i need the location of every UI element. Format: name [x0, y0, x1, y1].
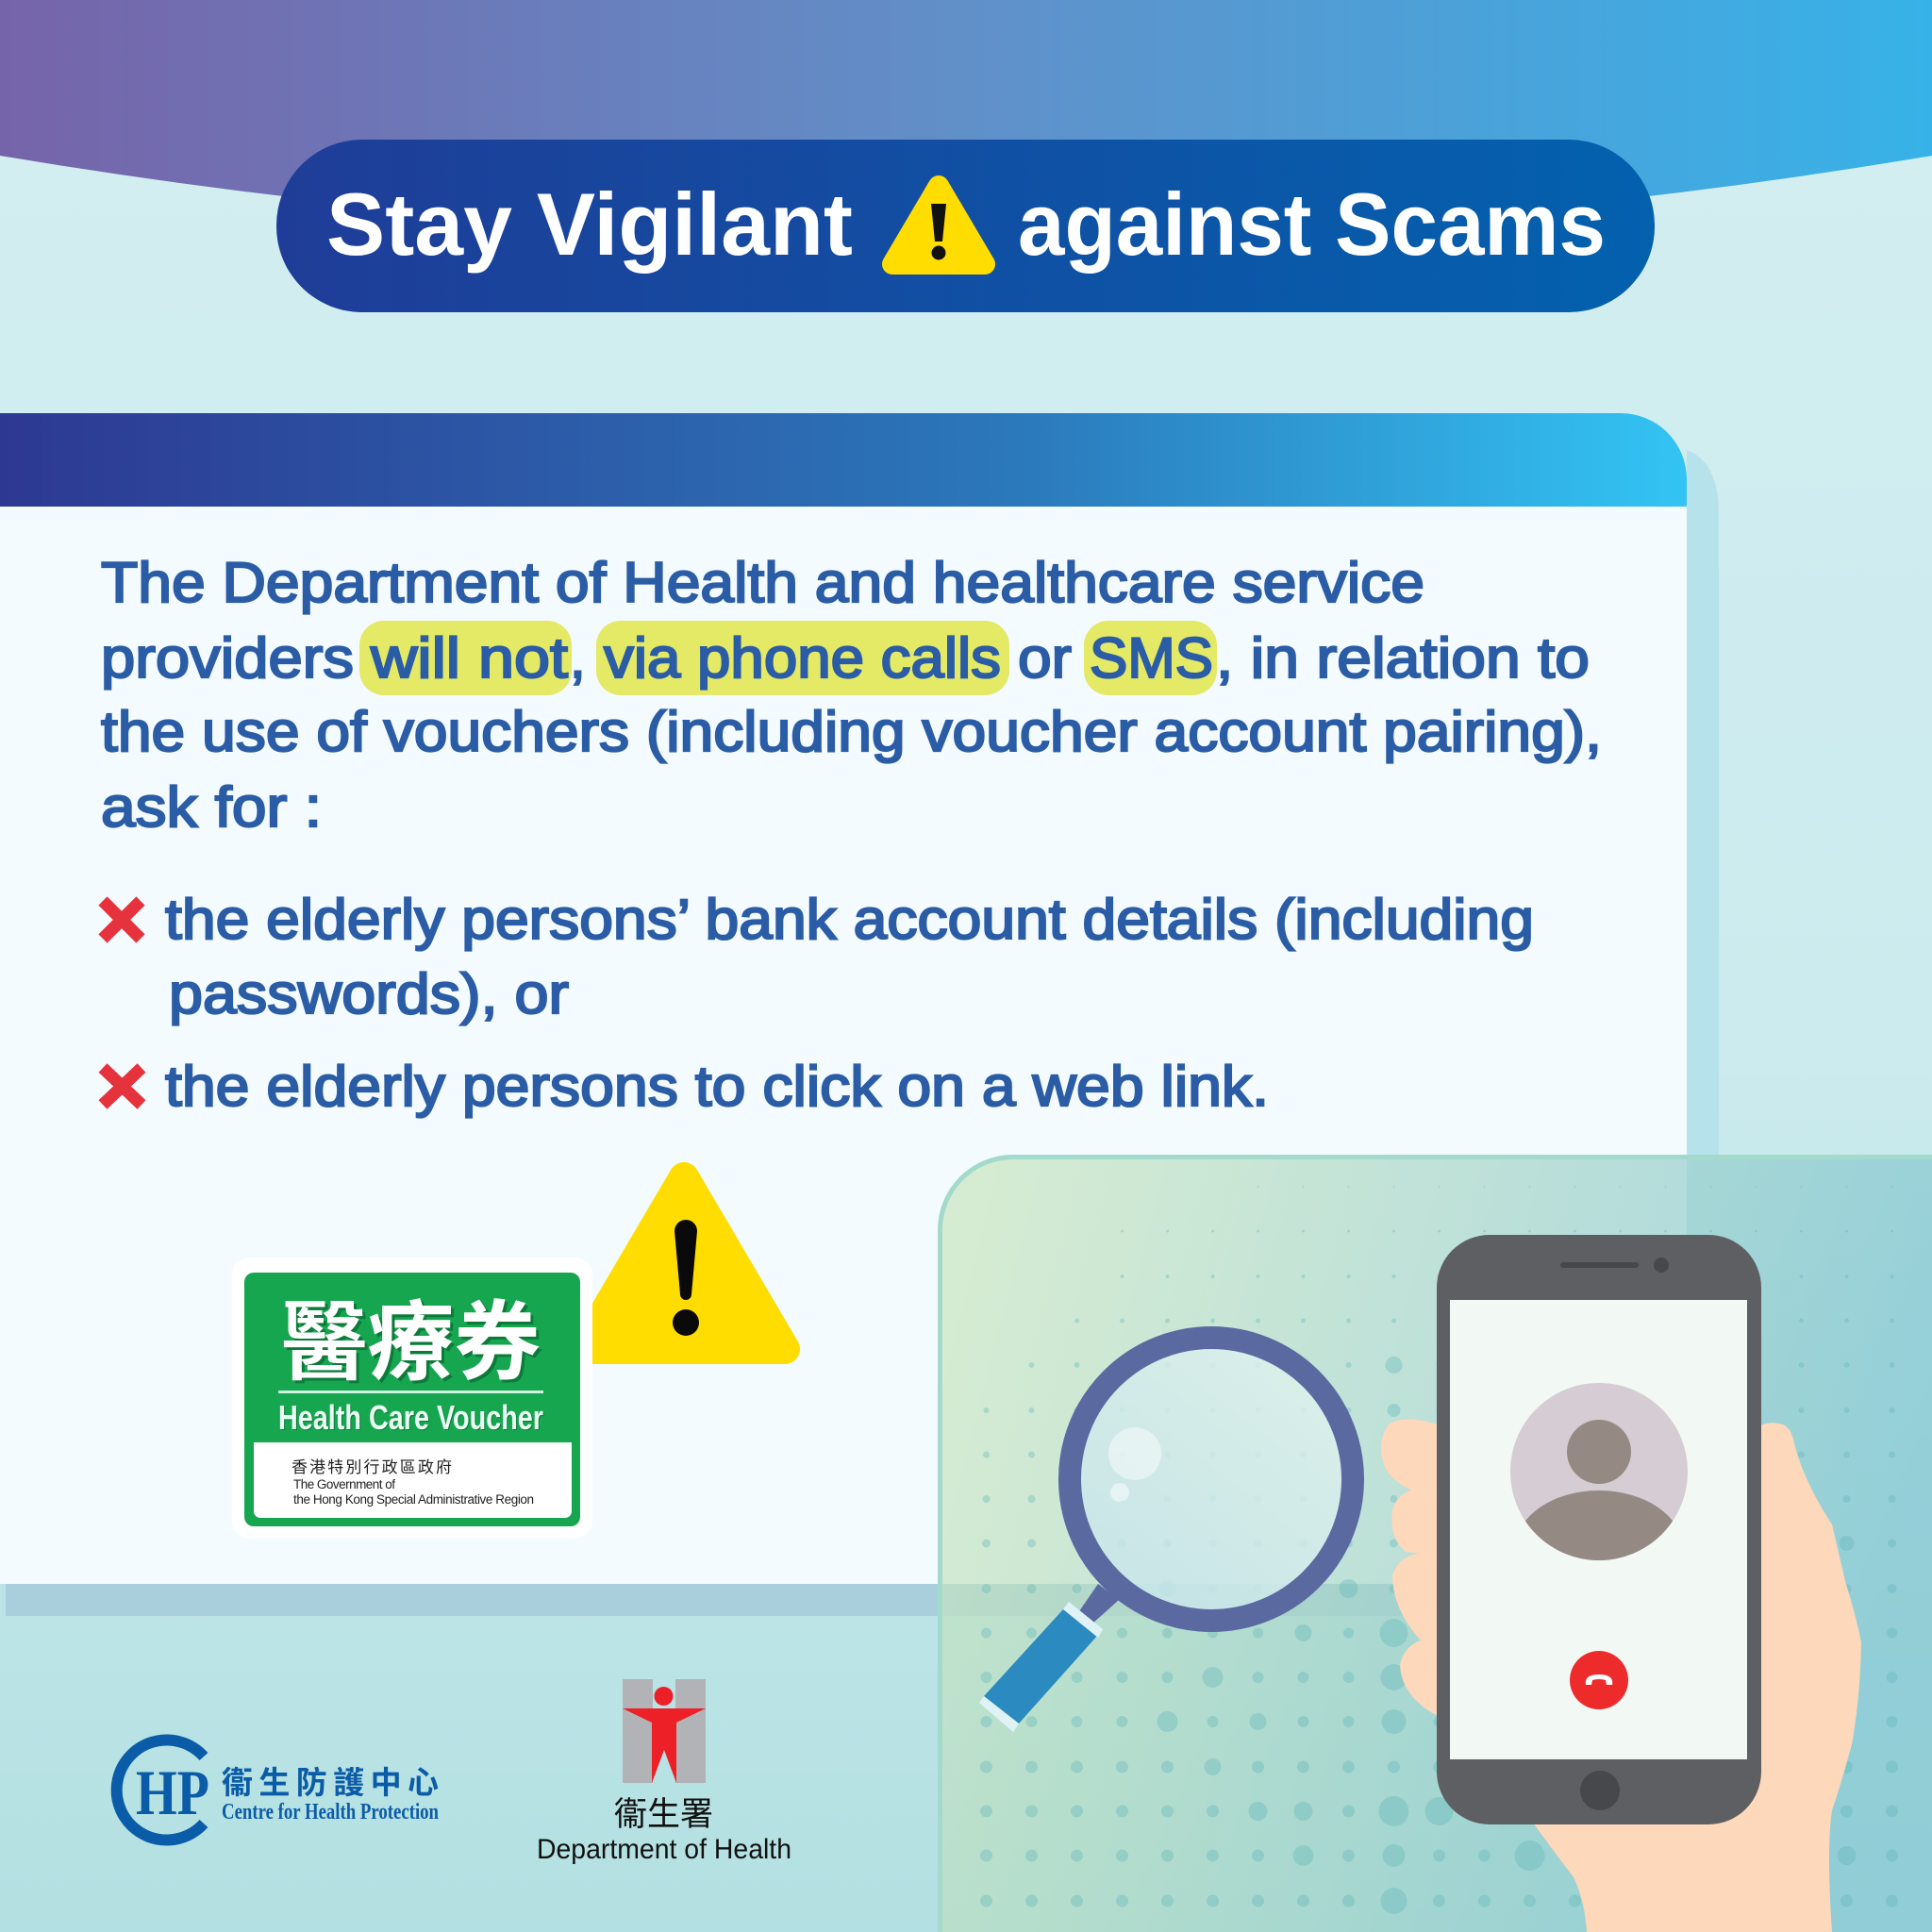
line 2: providers — [101, 626, 354, 690]
line 2: via phone calls — [604, 626, 1001, 690]
voucher chinese title: 醫療券 — [284, 1275, 543, 1401]
card right shadow — [1687, 450, 1719, 1155]
panel background — [938, 1155, 1932, 1932]
line 2: or — [1018, 626, 1072, 690]
phone body — [1437, 1235, 1761, 1824]
end call button — [1570, 1651, 1628, 1709]
list item 2: the elderly persons to click on a web link. — [165, 1055, 1269, 1118]
line 2: , in relation to — [1216, 626, 1590, 690]
logo: centre for health protection — [117, 1740, 439, 1840]
dot pattern — [987, 1187, 1932, 1914]
health care voucher logo: Health Care Voucher — [278, 1398, 543, 1437]
phone speaker — [1560, 1262, 1639, 1268]
grey H emblem — [623, 1679, 653, 1783]
list item 1: passwords), or — [169, 962, 569, 1025]
line 3: the use of vouchers (including voucher account pairing), — [101, 700, 1602, 763]
title: stay vigilant: Stay Vigilant — [326, 175, 853, 274]
caller avatar — [1510, 1383, 1688, 1560]
line 2: SMS — [1090, 626, 1213, 690]
english name: Centre for Health Protection — [222, 1800, 439, 1824]
highlight: will not — [359, 621, 572, 695]
card body — [0, 507, 1687, 1584]
finger 1 — [1381, 1419, 1443, 1500]
phone screen — [1450, 1300, 1747, 1759]
voucher government box: the Hong Kong Special Administrative Region — [293, 1492, 534, 1507]
list item 1: the elderly persons’ bank account details (including — [165, 888, 1534, 951]
lens — [1070, 1338, 1353, 1621]
icon: magnifying glass — [979, 1338, 1353, 1732]
panel: main card — [0, 413, 1719, 1616]
title pill — [276, 140, 1655, 312]
icon: hand holding phone — [1381, 1235, 1861, 1932]
english name: Department of Health — [537, 1834, 791, 1865]
line 4: ask for : — [101, 775, 322, 839]
top gradient banner — [0, 0, 1932, 237]
icon: red cross — [103, 901, 141, 939]
finger 4 — [1400, 1637, 1443, 1717]
phone home button — [1580, 1771, 1620, 1810]
handle — [984, 1609, 1098, 1724]
stem — [1079, 1584, 1119, 1624]
card header band — [0, 413, 1687, 507]
title: against scams: against Scams — [1018, 175, 1606, 274]
highlight: via phone calls — [596, 621, 1009, 695]
red figure — [655, 1687, 674, 1706]
chinese name: 衞生防護中心 — [222, 1765, 439, 1800]
line 1: The Department of Health and healthcare service — [101, 551, 1424, 614]
highlight: SMS — [1084, 621, 1217, 695]
HP letters: HP — [136, 1757, 209, 1828]
voucher government box — [254, 1442, 572, 1518]
list item 1 — [103, 888, 1534, 1025]
logo: department of health — [537, 1679, 791, 1865]
voucher government box: 香港特別行政區政府 — [291, 1458, 452, 1476]
text block: intro — [101, 551, 1602, 839]
line 2: will not — [370, 626, 568, 690]
illustration panel — [938, 1155, 1932, 1932]
voucher english title: Health Care Voucher — [279, 1399, 544, 1438]
finger 3 — [1392, 1553, 1443, 1640]
phone camera — [1654, 1257, 1669, 1273]
line 2: , — [570, 626, 586, 690]
health care voucher logo — [232, 1257, 592, 1538]
icon: red cross — [103, 1068, 142, 1105]
hand — [1528, 1423, 1861, 1932]
icon: small warning triangle — [892, 186, 985, 264]
chinese name: 衞生署 — [614, 1796, 713, 1833]
card bottom shadow — [6, 1584, 1687, 1616]
finger 2 — [1391, 1487, 1443, 1557]
icon: large warning triangle — [583, 1177, 785, 1349]
voucher government box: The Government of — [293, 1477, 395, 1491]
voucher chinese title: 醫療券 — [281, 1273, 541, 1398]
C ring — [117, 1740, 204, 1840]
